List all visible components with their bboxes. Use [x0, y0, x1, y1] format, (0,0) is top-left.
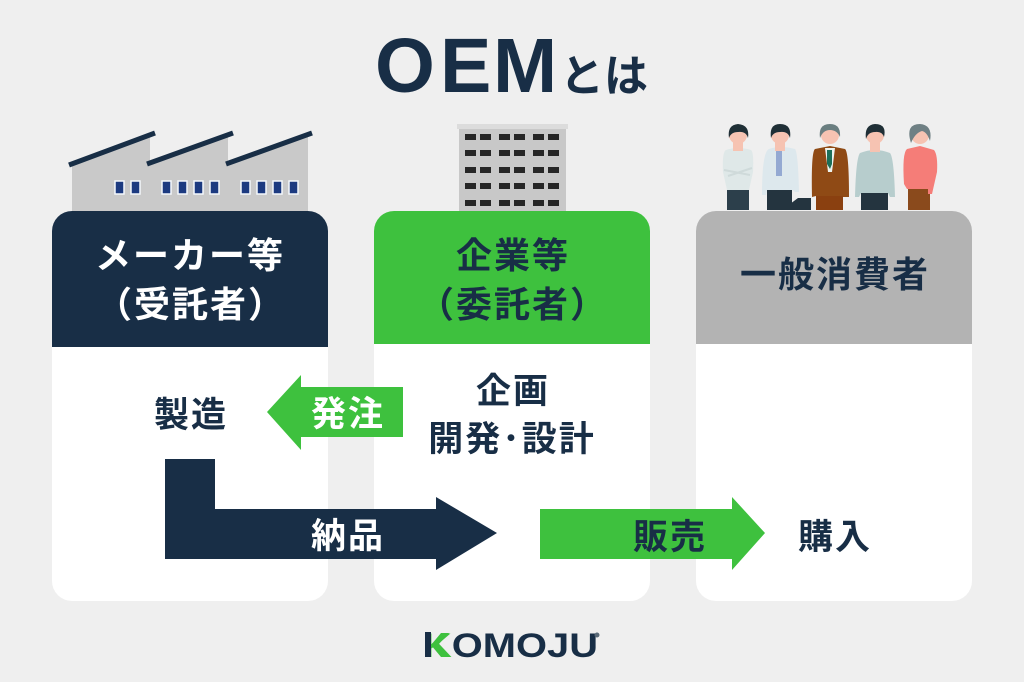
arrow: delivery: 納品 [311, 517, 385, 556]
panel: consumers [696, 211, 972, 601]
title [375, 23, 648, 109]
arrow: sales [540, 497, 765, 570]
text: purchase: 購入 [798, 518, 872, 557]
icon: office building [457, 124, 568, 211]
text: planning and design: 企画 [476, 372, 550, 411]
person 3 [812, 124, 849, 210]
arrow: order: 発注 [311, 395, 385, 434]
title: とは [560, 52, 648, 101]
person 5 [903, 124, 937, 210]
icon: factory [69, 133, 312, 211]
heading: company [418, 235, 608, 325]
heading: company: （委託者） [418, 284, 608, 325]
text: planning and design [428, 372, 596, 459]
panel: company [374, 211, 650, 601]
text: planning and design: 開発･設計 [428, 420, 596, 459]
heading: manufacturer: メーカー等 [95, 235, 285, 276]
icon: consumers group [723, 124, 937, 210]
arrow: order [267, 375, 403, 450]
person 1 [723, 124, 753, 210]
text: manufacturing: 製造 [154, 396, 228, 435]
title: OEM [375, 23, 557, 109]
arrow: delivery [165, 459, 497, 570]
person 2 [762, 124, 811, 210]
arrow: sales: 販売 [633, 518, 707, 557]
person 4 [855, 124, 895, 210]
heading: company: 企業等 [456, 235, 570, 276]
heading: consumers: 一般消費者 [740, 254, 930, 295]
logo: KOMOJU: KOMOJU [423, 627, 598, 665]
heading: manufacturer: （受託者） [96, 284, 286, 325]
panel: manufacturer [52, 211, 328, 601]
heading: manufacturer [95, 235, 286, 325]
